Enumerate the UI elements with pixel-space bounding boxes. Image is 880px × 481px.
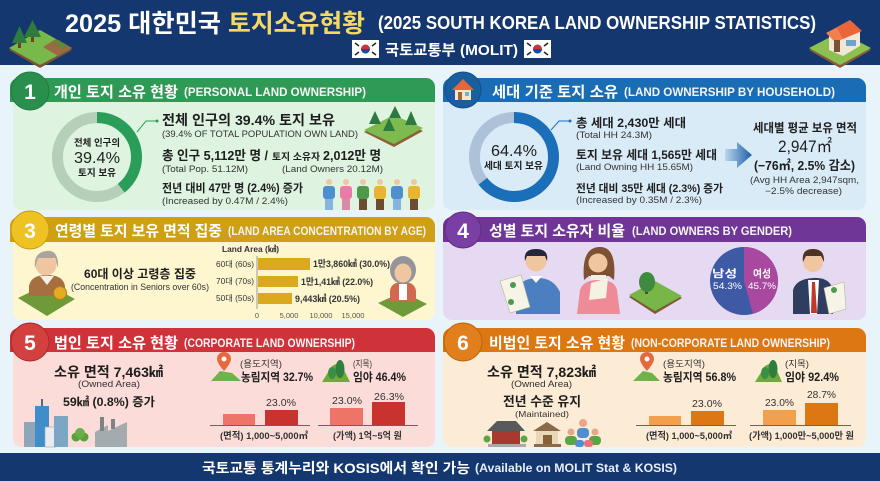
land category: forest — [755, 359, 839, 384]
pie chart: gender — [710, 247, 778, 315]
average household area: 세대별 평균 보유 면적 — [753, 121, 857, 135]
pie chart: gender: 45.7% — [748, 281, 777, 292]
owned area text: 59㎢ (0.8%) 증가 — [63, 394, 155, 409]
icon: temple, museum and group — [484, 419, 601, 447]
panel 3 header: (LAND AREA CONCENTRATION BY AGE) — [228, 226, 426, 238]
bar chart: area band: (면적) 1,000~5,000㎡ — [646, 430, 732, 442]
average household area — [750, 121, 859, 196]
household statistics text: 전년 대비 35만 세대 (2.3%) 증가 — [576, 181, 723, 195]
land category: forest: (지목) — [785, 359, 809, 369]
bar chart: value band — [318, 391, 418, 442]
owned area text: 전년 수준 유지 — [503, 394, 581, 409]
title — [65, 10, 816, 38]
icon: senior woman on land — [378, 256, 427, 317]
key statistics text: (Total Pop. 51.12M) — [162, 164, 248, 175]
bar chart: value band: 26.3% — [374, 391, 404, 403]
land use: agricultural zone: (용도지역) — [240, 359, 282, 369]
bar chart: area band — [636, 398, 736, 442]
footer: 국토교통 통계누리와 KOSIS에서 확인 가능 — [202, 460, 470, 476]
land category: forest: 임야 46.4% — [353, 370, 406, 384]
bar chart: value band: 23.0% — [332, 395, 362, 407]
key statistics text: 총 인구 5,112만 명 / — [162, 148, 268, 163]
age concentration text: 60대 이상 고령층 집중 — [84, 267, 196, 281]
icon: house on lawn — [809, 20, 871, 68]
household statistics text: 토지 보유 세대 1,565만 세대 — [576, 148, 717, 162]
subtitle: ministry: 국토교통부 (MOLIT) — [385, 42, 518, 59]
title: (2025 SOUTH KOREA LAND OWNERSHIP STATISTICS) — [378, 13, 816, 33]
average household area: (−76㎡, 2.5% 감소) — [754, 158, 855, 173]
icon: land with trees — [364, 106, 423, 147]
pie chart: gender: 54.3% — [713, 281, 743, 292]
panel 3: land area by age — [10, 211, 435, 320]
average household area: 2,947㎡ — [778, 137, 832, 156]
key statistics text — [156, 112, 383, 207]
donut chart: 64.4% — [474, 118, 554, 196]
bar chart: value band: (가액) 1,000만~5,000만 원 — [749, 430, 854, 442]
footer: (Available on MOLIT Stat & KOSIS) — [475, 461, 677, 475]
key statistics text: (Land Owners 20.12M) — [282, 164, 383, 175]
panel 3 header — [10, 211, 435, 249]
owned area text: (Maintained) — [515, 409, 569, 419]
average household area: −2.5% decrease) — [765, 186, 842, 196]
icon: people row — [323, 179, 420, 210]
key statistics text: 전체 인구의 39.4% 토지 보유 — [162, 112, 335, 128]
panel 6 header: (NON-CORPORATE LAND OWNERSHIP) — [631, 338, 830, 350]
donut chart: 39.4%: 전체 인구의 — [74, 138, 120, 149]
bar chart: land area by age: 15,000 — [342, 311, 364, 320]
household statistics text: (Land Owning HH 15.65M) — [576, 162, 693, 173]
panel 6 header: 6 — [457, 332, 469, 355]
panel 5 header — [10, 323, 435, 361]
panel 4 header: (LAND OWNERS BY GENDER) — [632, 226, 792, 238]
panel 2 header: 세대 기준 토지 소유 — [492, 84, 618, 101]
bar chart: land area by age: Land Area (㎢) — [222, 244, 279, 254]
land use: agricultural zone: (용도지역) — [663, 359, 705, 369]
household statistics text: (Increased by 0.35M / 2.3%) — [576, 195, 702, 206]
owned area text: 소유 면적 7,463㎢ — [54, 364, 163, 380]
title: 2025 대한민국 — [65, 10, 221, 38]
bar chart: land area by age: 0 — [255, 311, 259, 320]
bar chart: value band: (가액) 1억~5억 원 — [333, 430, 402, 442]
land use: agricultural zone — [633, 352, 736, 384]
icon: land plot with trees — [9, 20, 72, 68]
donut chart: 64.4%: 64.4% — [491, 143, 537, 160]
land category: forest: (지목) — [353, 359, 372, 369]
bar chart: land area by age — [216, 244, 390, 320]
panel 4 header — [443, 212, 866, 248]
icon: city and factory — [24, 399, 127, 447]
bar chart: land area by age: 1만1,41㎢ (22.0%) — [301, 277, 373, 288]
subtitle: ministry — [352, 40, 551, 59]
land category: forest: 임야 92.4% — [785, 370, 839, 384]
household statistics text — [568, 116, 723, 206]
bar chart: land area by age: 60대 (60s) — [216, 260, 254, 269]
header banner — [0, 0, 880, 68]
land use: agricultural zone — [211, 352, 313, 384]
panel 5 header: (CORPORATE LAND OWNERSHIP) — [184, 338, 355, 350]
panel 2 header — [443, 72, 866, 108]
title: 토지소유현황 — [228, 10, 365, 38]
donut chart: 39.4% — [58, 118, 136, 196]
land use: agricultural zone: 농림지역 56.8% — [663, 371, 736, 384]
bar chart: land area by age: 1만3,860㎢ (30.0%) — [313, 259, 390, 270]
panel 2 header: (LAND OWNERSHIP BY HOUSEHOLD) — [624, 87, 835, 99]
icon: senior man on land — [18, 251, 75, 316]
age concentration text: (Concentration in Seniors over 60s) — [71, 282, 209, 292]
icon: man in suit with document — [793, 249, 846, 314]
household statistics text: 총 세대 2,430만 세대 — [576, 116, 686, 130]
panel 3 header: 3 — [24, 220, 36, 243]
panel 2: household land ownership — [443, 72, 866, 210]
panel 4 header: 4 — [457, 220, 469, 243]
arrow — [725, 142, 752, 168]
panel 5: corporate land ownership — [10, 323, 435, 447]
owned area text: 소유 면적 7,823㎢ — [487, 364, 596, 380]
bar chart: area band: 23.0% — [266, 397, 296, 409]
age concentration text — [71, 267, 209, 292]
bar chart: land area by age: 10,000 — [310, 311, 332, 320]
pie chart: gender: 남성 — [712, 267, 737, 280]
icon: land with tree — [629, 272, 682, 314]
panel 6 header — [443, 323, 866, 361]
donut chart: 39.4%: 토지 보유 — [78, 167, 116, 179]
bar chart: area band — [210, 397, 310, 442]
key statistics text: 토지 소유자 — [272, 151, 320, 163]
bar chart: area band: 23.0% — [692, 398, 722, 410]
average household area: (Avg HH Area 2,947sqm, — [750, 175, 859, 185]
key statistics text: (39.4% OF TOTAL POPULATION OWN LAND) — [162, 129, 358, 140]
bar chart: area band: (면적) 1,000~5,000㎡ — [220, 430, 308, 442]
donut chart: 39.4%: 39.4% — [74, 150, 120, 167]
panel 4: land owners by gender — [443, 212, 866, 320]
panel 1 header: (PERSONAL LAND OWNERSHIP) — [184, 87, 366, 99]
panel 1 header: 1 — [24, 81, 36, 104]
connector line — [551, 121, 570, 130]
panel 5 header: 법인 토지 소유 현황 — [54, 335, 178, 352]
bar chart: land area by age: 50대 (50s) — [216, 294, 254, 303]
panel 6: non-corporate land ownership — [443, 323, 866, 447]
panel 3 header: 연령별 토지 보유 면적 집중 — [55, 223, 222, 240]
bar chart: value band: 23.0% — [765, 397, 794, 409]
panel 6 header: 비법인 토지 소유 현황 — [489, 335, 625, 352]
household statistics text: (Total HH 24.3M) — [576, 130, 652, 141]
bar chart: land area by age: 70대 (70s) — [216, 277, 254, 286]
key statistics text: 2,012만 명 — [323, 148, 381, 163]
footer — [0, 453, 880, 481]
key statistics text: (Increased by 0.47M / 2.4%) — [162, 196, 288, 207]
panel 1 header — [10, 72, 435, 110]
land use: agricultural zone: 농림지역 32.7% — [241, 371, 313, 384]
donut chart: 64.4%: 세대 토지 보유 — [484, 160, 543, 172]
owned area text — [54, 364, 163, 409]
icon: woman with document — [577, 247, 620, 314]
bar chart: value band: 28.7% — [807, 389, 836, 401]
panel 4 header: 성별 토지 소유자 비율 — [489, 223, 625, 240]
panel 5 header: 5 — [24, 332, 36, 355]
owned area text: (Owned Area) — [78, 379, 140, 389]
icon: man with document — [500, 249, 560, 314]
bar chart: land area by age: 5,000 — [280, 311, 298, 320]
land category: forest — [322, 359, 406, 384]
bar chart: value band — [749, 389, 854, 442]
panel 1: personal land ownership — [10, 72, 435, 210]
key statistics text: 전년 대비 47만 명 (2.4%) 증가 — [162, 181, 303, 195]
connector line — [137, 121, 157, 132]
owned area text: (Owned Area) — [511, 379, 572, 389]
owned area text — [487, 364, 596, 419]
bar chart: land area by age: 9,443㎢ (20.5%) — [295, 294, 360, 305]
panel 1 header: 개인 토지 소유 현황 — [54, 84, 178, 101]
pie chart: gender: 여성 — [753, 267, 771, 280]
